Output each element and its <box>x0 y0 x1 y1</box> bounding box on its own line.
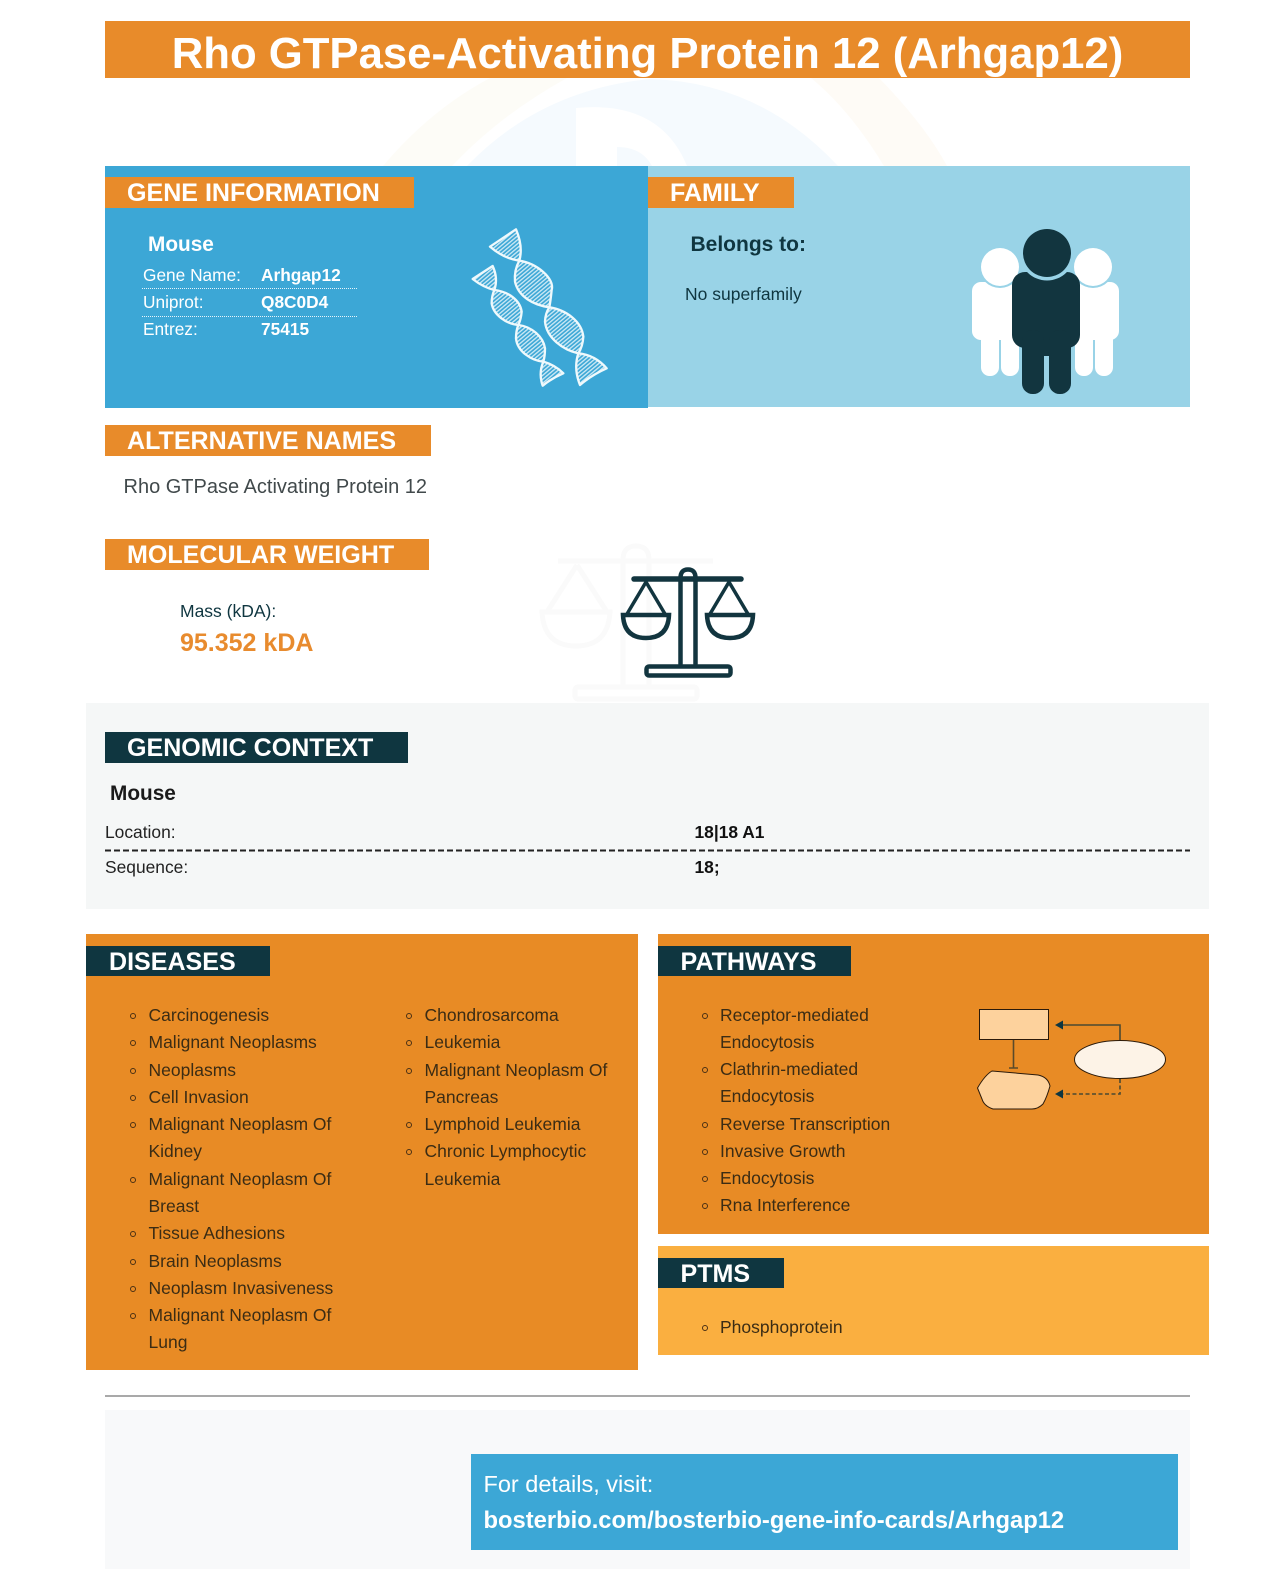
disease list column 1: Brain Neoplasms <box>148 1251 282 1271</box>
disease list column 1: Carcinogenesis <box>148 1005 269 1025</box>
alternative name text: Rho GTPase Activating Protein 12 <box>124 476 427 498</box>
superfamily value: No superfamily <box>685 284 802 304</box>
pathway list: Rna Interference <box>720 1195 850 1215</box>
heading: pathways: PATHWAYS <box>680 948 816 976</box>
title banner: Rho GTPase-Activating Protein 12 (Arhgap12) <box>172 29 1123 78</box>
panel: genomic context <box>86 703 1209 909</box>
pathway diagram <box>977 1009 1166 1110</box>
panel: family <box>648 166 1190 407</box>
heading: molecular weight: MOLECULAR WEIGHT <box>127 541 394 569</box>
mass value: 95.352 kDA <box>180 629 313 657</box>
disease list column 2: Leukemia <box>424 1169 500 1189</box>
ptm list: Phosphoprotein <box>720 1317 843 1337</box>
disease list column 1: Malignant Neoplasm Of <box>148 1114 331 1134</box>
uniprot value: Q8C0D4 <box>261 292 328 312</box>
disease list column 2: Malignant Neoplasm Of <box>424 1060 607 1080</box>
disease list column 1: Neoplasms <box>148 1060 236 1080</box>
icon: balance scales <box>620 567 756 678</box>
disease list column 1: Malignant Neoplasm Of <box>148 1169 331 1189</box>
disease list column 1: Breast <box>148 1196 199 1216</box>
entrez value: 75415 <box>261 319 309 339</box>
icon: dna double helix <box>472 228 608 387</box>
disease list column 1: Neoplasm Invasiveness <box>148 1278 333 1298</box>
pathway list: Endocytosis <box>720 1032 814 1052</box>
gene name label: Gene Name: <box>143 265 241 285</box>
pathway list: Invasive Growth <box>720 1141 845 1161</box>
location label: Location: <box>105 822 176 842</box>
heading: diseases: DISEASES <box>109 948 236 976</box>
pathway list: Clathrin-mediated <box>720 1059 858 1079</box>
callout url: bosterbio.com/bosterbio-gene-info-cards/Arhgap12 <box>484 1507 1064 1534</box>
icon: group of people <box>972 229 1119 394</box>
heading: ptms: PTMS <box>680 1260 750 1288</box>
disease list column 1 <box>130 1005 333 1352</box>
disease list column 2: Lymphoid Leukemia <box>424 1114 580 1134</box>
callout label: For details, visit: <box>484 1471 653 1497</box>
heading: family <box>648 177 794 208</box>
heading: alternative names: ALTERNATIVE NAMES <box>127 427 396 455</box>
heading: pathways <box>658 946 851 976</box>
species label: Mouse <box>110 782 176 805</box>
disease list column 1: Kidney <box>148 1141 202 1161</box>
mass label: Mass (kDA): <box>180 601 276 621</box>
panel: gene information <box>105 166 648 408</box>
gene name value: Arhgap12 <box>261 265 341 285</box>
species label: Mouse <box>148 233 214 256</box>
disease list column 1: Lung <box>148 1332 187 1352</box>
callout: details link <box>471 1454 1178 1550</box>
disease list column 2 <box>406 1005 608 1189</box>
panel: pathways <box>658 934 1209 1234</box>
panel: footer <box>105 1410 1190 1569</box>
pathway list: Reverse Transcription <box>720 1114 890 1134</box>
entrez label: Entrez: <box>143 319 198 339</box>
disease list column 1: Malignant Neoplasm Of <box>148 1305 331 1325</box>
heading: genomic context: GENOMIC CONTEXT <box>127 734 373 762</box>
heading: diseases <box>86 946 270 976</box>
watermark: faint logo and ghost scales <box>468 78 946 166</box>
sequence value: 18; <box>694 857 720 877</box>
pathway list: Endocytosis <box>720 1086 814 1106</box>
disease list column 1: Cell Invasion <box>148 1087 249 1107</box>
disease list column 2: Leukemia <box>424 1032 500 1052</box>
disease list column 2: Chondrosarcoma <box>424 1005 559 1025</box>
disease list column 1: Malignant Neoplasms <box>148 1032 317 1052</box>
sequence label: Sequence: <box>105 857 188 877</box>
disease list column 2: Pancreas <box>424 1087 498 1107</box>
uniprot label: Uniprot: <box>143 292 204 312</box>
pathway list: Receptor-mediated <box>720 1005 869 1025</box>
heading: family: FAMILY <box>670 179 760 207</box>
belongs to label: Belongs to: <box>690 233 806 256</box>
panel: ptms <box>658 1246 1209 1355</box>
disease list column 2: Chronic Lymphocytic <box>424 1141 586 1161</box>
pathway list <box>702 1005 890 1215</box>
heading: gene information: GENE INFORMATION <box>127 179 380 207</box>
heading: ptms <box>658 1258 784 1288</box>
disease list column 1: Tissue Adhesions <box>148 1223 285 1243</box>
location value: 18|18 A1 <box>694 822 764 842</box>
pathway list: Endocytosis <box>720 1168 814 1188</box>
panel: diseases <box>86 934 638 1370</box>
